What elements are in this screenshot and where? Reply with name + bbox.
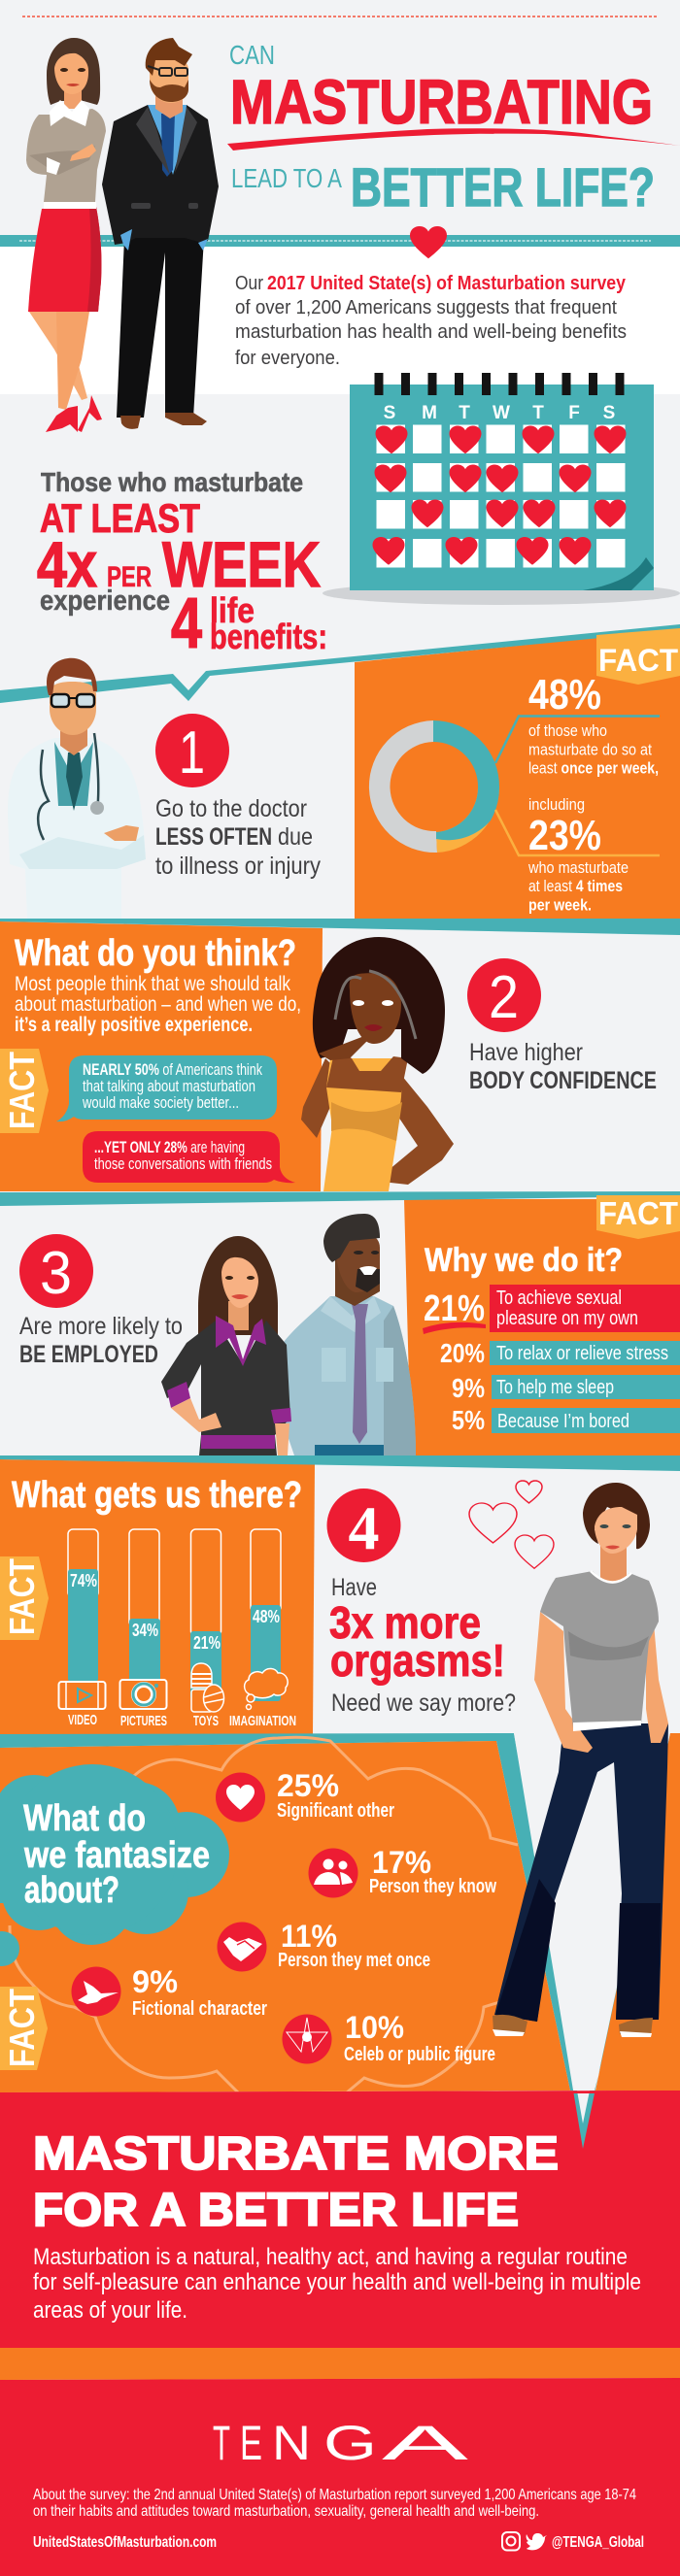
social media handles: @TENGA_Global (552, 2534, 644, 2551)
panel: what gets us there background: What gets us there? (12, 1475, 302, 1516)
headline: at least 4x per week: 4x (37, 528, 97, 600)
fantasy stat: 9%: 9% (132, 1964, 178, 1999)
illustration: woman with curly hair (301, 937, 454, 1191)
fantasy stat: 10%: 10% (345, 2010, 404, 2045)
panel: red conclusion background (0, 2091, 680, 2576)
headline: at least 4x per week: WEEK (162, 528, 321, 600)
benefit 1 text: LESS OFTEN (155, 823, 272, 851)
bar chart: PICTURES (120, 1713, 167, 1729)
panel: what do we fantasize about (0, 1733, 680, 2149)
fantasy stat: 17% (309, 1845, 496, 1897)
headline: at least 4x per week: benefits: (210, 617, 327, 656)
bar chart: 48% (253, 1607, 280, 1626)
panel: what do you think: What do you think? (15, 933, 296, 974)
fantasy stat: 10% (282, 2010, 495, 2065)
donut text: of those who (528, 721, 607, 740)
number 3 badge (19, 1234, 93, 1308)
fantasy stat: 10%: Celeb or public figure (344, 2044, 495, 2065)
fantasy stat: 17%: 17% (372, 1845, 431, 1880)
fantasy stat: 11%: Person they met once (278, 1950, 430, 1971)
calendar: T (532, 403, 544, 423)
benefit 3 text: BE EMPLOYED (19, 1341, 158, 1368)
number 2 badge: 2 (489, 964, 519, 1031)
illustration: woman in grey t-shirt and jeans (493, 1483, 668, 2037)
fantasy stat: 9%: Fictional character (132, 1998, 267, 2020)
donut text: least once per week, (528, 759, 659, 777)
benefit 2 text: Have higher (469, 1039, 583, 1066)
icon: thought cloud (245, 1668, 288, 1709)
FACT tag: once a week (596, 628, 680, 685)
calendar: T (459, 403, 470, 423)
intro text: of over 1,200 Americans suggests that frequent (235, 297, 617, 318)
icon: camera (120, 1680, 167, 1709)
benefit 4 text (329, 1574, 516, 1717)
donut text: 48% (528, 671, 601, 719)
reasons list: 20% (440, 1338, 485, 1368)
social media handles (502, 2532, 644, 2551)
benefit 1 text: due (278, 823, 313, 851)
fantasy stat: 17%: Person they know (369, 1876, 496, 1897)
speech bubble: only 28%: those conversations with friends (94, 1154, 272, 1173)
fantasy stat: 25%: Significant other (277, 1800, 394, 1822)
headline: at least 4x per week: PER (107, 561, 152, 593)
FACT tag: why: FACT (598, 1195, 678, 1231)
intro text: Our (235, 273, 263, 294)
bar chart: TOYS (193, 1713, 219, 1729)
reasons list: To achieve sexual (496, 1288, 622, 1309)
conclusion text (33, 2128, 641, 2324)
FACT tag: vertical 1: FACT (2, 1052, 42, 1129)
bar chart: 34% (132, 1621, 158, 1640)
intro text (235, 273, 627, 369)
headline: at least 4x per week: Those who masturbate (41, 467, 303, 497)
fantasy stat: 11% (218, 1919, 430, 1971)
title (227, 40, 680, 217)
TENGA logo: G (323, 2416, 377, 2470)
donut text: including (528, 795, 585, 814)
donut text: at least 4 times (528, 877, 623, 895)
speech bubble: nearly 50%: that talking about masturbation (83, 1077, 255, 1095)
benefit 4 text: 3x more (329, 1597, 481, 1648)
number 2 badge (467, 958, 541, 1032)
illustration: woman and man in office wear (161, 1214, 416, 1456)
reasons list: To help me sleep (496, 1377, 614, 1398)
donut text: who masturbate (527, 858, 629, 877)
about the survey: on their habits and attitudes toward masturbation, sexuality, general health and well-being. (33, 2503, 539, 2520)
panel: what do you think: Most people think that we should talk (15, 973, 290, 995)
header section background (0, 17, 680, 394)
icon: instagram (502, 2532, 520, 2550)
about the survey (33, 2487, 636, 2520)
bar chart (58, 1529, 296, 1729)
illustration: doctor (8, 658, 146, 919)
donut text: masturbate do so at (528, 740, 652, 759)
illustration: woman in red skirt (26, 38, 106, 432)
number 1 badge: 1 (179, 719, 205, 786)
panel: benefit 1 fact background (355, 629, 680, 919)
thought cloud heading: about? (24, 1870, 119, 1911)
donut text (527, 671, 659, 915)
TENGA logo: N (272, 2416, 311, 2470)
fantasy stat: 25%: 25% (277, 1768, 339, 1803)
calendar: F (568, 403, 580, 423)
benefit 3 text (19, 1313, 183, 1368)
FACT tag: vertical 2: FACT (2, 1558, 42, 1635)
donut text: per week. (528, 895, 592, 915)
icon: video (58, 1682, 105, 1709)
reasons list: 21% (424, 1288, 485, 1329)
reasons list: pleasure on my own (496, 1308, 638, 1329)
calendar: S (603, 403, 615, 423)
panel: what do you think: about masturbation – and when we do, (15, 993, 301, 1016)
fantasy stat: 25% (216, 1768, 394, 1822)
TENGA logo: A (382, 2416, 470, 2470)
speech bubble: nearly 50%: NEARLY 50% of Americans think (83, 1060, 262, 1079)
headline: at least 4x per week: 4 (171, 585, 202, 663)
headline: at least 4x per week: experience (40, 585, 170, 617)
headline: at least 4x per week (37, 467, 327, 663)
headline: at least 4x per week: life (210, 590, 255, 630)
website link: UnitedStatesOfMasturbation.com (33, 2534, 217, 2551)
TENGA logo: T (213, 2416, 230, 2470)
teal speech divider (0, 624, 680, 703)
number 4 badge (326, 1489, 400, 1562)
benefit 4 text: orgasms! (330, 1635, 505, 1686)
reasons list: 9% (452, 1373, 485, 1403)
benefit 4 text: Have (331, 1574, 377, 1601)
icon: twitter bird (527, 2533, 547, 2550)
FACT tag: vertical 2 (0, 1556, 49, 1640)
speech bubble: only 28% (83, 1131, 295, 1183)
benefit 1 text (155, 795, 321, 880)
thought cloud heading (0, 1764, 229, 1966)
reasons list: Why we do it? (425, 1242, 623, 1279)
bar chart: IMAGINATION (229, 1713, 296, 1729)
benefit 2 text (469, 1039, 657, 1094)
title: LEAD TO A (231, 163, 342, 193)
bar chart: 74% (70, 1571, 97, 1590)
TENGA logo: E (240, 2416, 262, 2470)
donut chart (369, 717, 660, 855)
FACT tag: once a week: FACT (598, 643, 678, 678)
speech bubble: nearly 50% (56, 1055, 277, 1121)
fantasy stat: 11%: 11% (281, 1919, 337, 1954)
number 3 badge: 3 (40, 1240, 72, 1307)
headline: at least 4x per week: AT LEAST (40, 495, 200, 541)
calendar (323, 373, 680, 605)
speech bubble: only 28%: ...YET ONLY 28% are having (94, 1138, 245, 1156)
icon: toys (191, 1663, 223, 1712)
reasons list: 5% (452, 1405, 485, 1435)
donut text: 23% (528, 812, 601, 859)
icon: heart divider (410, 226, 447, 258)
icon: outline hearts (469, 1481, 554, 1568)
thought cloud heading: we fantasize (23, 1835, 210, 1876)
panel: what do you think (0, 919, 680, 1191)
reasons list (423, 1242, 680, 1435)
benefit 4 text: Need we say more? (331, 1689, 516, 1717)
benefit 1 text: Go to the doctor (155, 795, 307, 822)
bar chart: 21% (193, 1633, 221, 1653)
benefit 3 text: Are more likely to (19, 1313, 183, 1340)
speech bubble: nearly 50%: would make society better... (82, 1093, 239, 1112)
reasons list: Because I’m bored (497, 1411, 629, 1432)
panel: what do you think: it’s a really positive experience. (15, 1014, 253, 1036)
illustration: man in black suit (102, 38, 219, 429)
calendar: S (384, 403, 395, 423)
FACT tag: vertical 3: FACT (2, 1989, 42, 2067)
intro text: masturbation has health and well-being benefits (235, 321, 627, 343)
conclusion text: MASTURBATE MORE (33, 2128, 559, 2180)
calendar: M (422, 403, 437, 423)
intro text: for everyone. (235, 348, 340, 369)
calendar: W (493, 403, 510, 423)
number 4 badge: 4 (348, 1493, 379, 1562)
benefit 1 text: to illness or injury (155, 853, 321, 880)
thought cloud heading: What do (23, 1798, 146, 1839)
panel: what gets us there background (0, 1455, 680, 1734)
intro text: 2017 United State(s) of Masturbation survey (267, 273, 627, 294)
bar chart: VIDEO (68, 1712, 97, 1728)
conclusion text: areas of your life. (33, 2297, 187, 2324)
panel: why we do it background (0, 1191, 680, 1455)
fantasy stat: 9% (72, 1964, 267, 2020)
conclusion text: FOR A BETTER LIFE (33, 2185, 519, 2236)
title: CAN (229, 40, 275, 70)
number 1 badge (155, 714, 229, 787)
